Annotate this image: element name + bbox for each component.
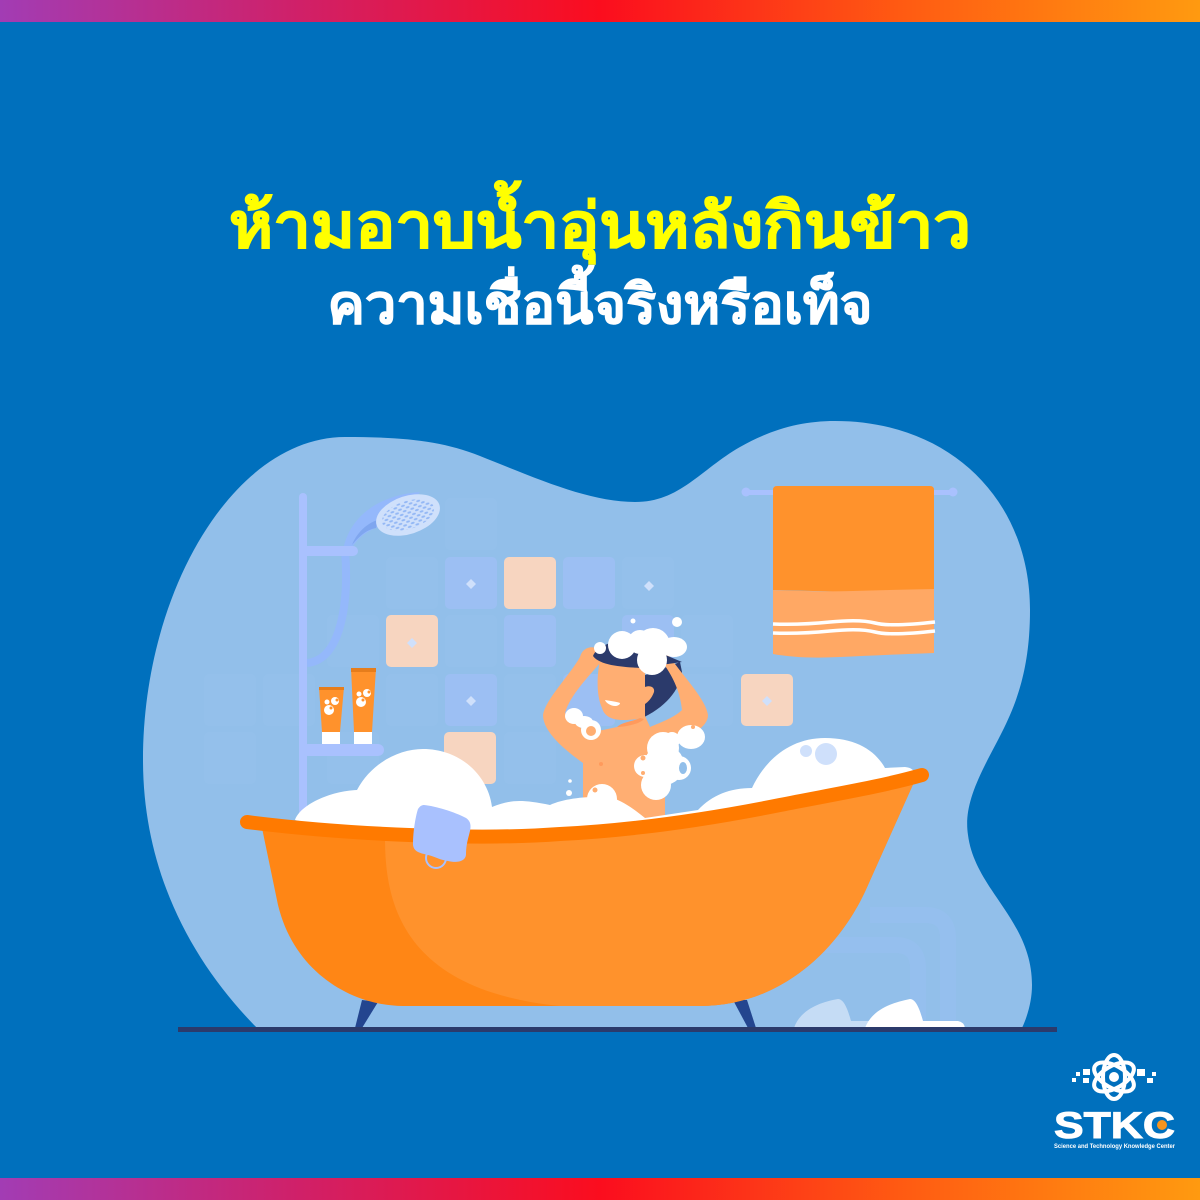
faint wall pipes [800, 915, 948, 1025]
title: ห้ามอาบน้ำอุ่นหลังกินข้าว [229, 180, 971, 264]
neck shadow [617, 718, 644, 727]
background blob [143, 421, 1032, 1028]
head [598, 660, 645, 720]
body and arms [543, 647, 708, 820]
subtitle: ความเชื่อนี้จริงหรือเท็จ [328, 265, 872, 335]
slippers [794, 999, 965, 1028]
shower rail and hose [299, 492, 420, 823]
ear [645, 686, 654, 704]
hair back [640, 662, 682, 719]
person [543, 617, 708, 820]
body foam [565, 708, 705, 814]
wall tiles [204, 498, 793, 784]
atom icon [1089, 1055, 1139, 1099]
washcloth [413, 805, 471, 868]
mouth [605, 700, 620, 706]
shower head [371, 487, 445, 543]
bottles on shelf [319, 668, 376, 744]
top gradient bar [0, 0, 1200, 22]
bath foam [295, 738, 915, 845]
floor line [178, 1027, 1057, 1032]
towel and rail [742, 486, 958, 658]
STKC logo [1054, 1055, 1176, 1150]
tagline: Science and Technology Knowledge Center [1054, 1144, 1176, 1150]
illustration: bathroom scene [143, 421, 1032, 1028]
bathtub [247, 775, 922, 1006]
hair foam [594, 617, 687, 675]
bathtub feet [355, 1000, 756, 1028]
wordmark: STKC [1054, 1105, 1175, 1146]
bottom gradient bar [0, 1178, 1200, 1200]
hair top [593, 640, 682, 668]
